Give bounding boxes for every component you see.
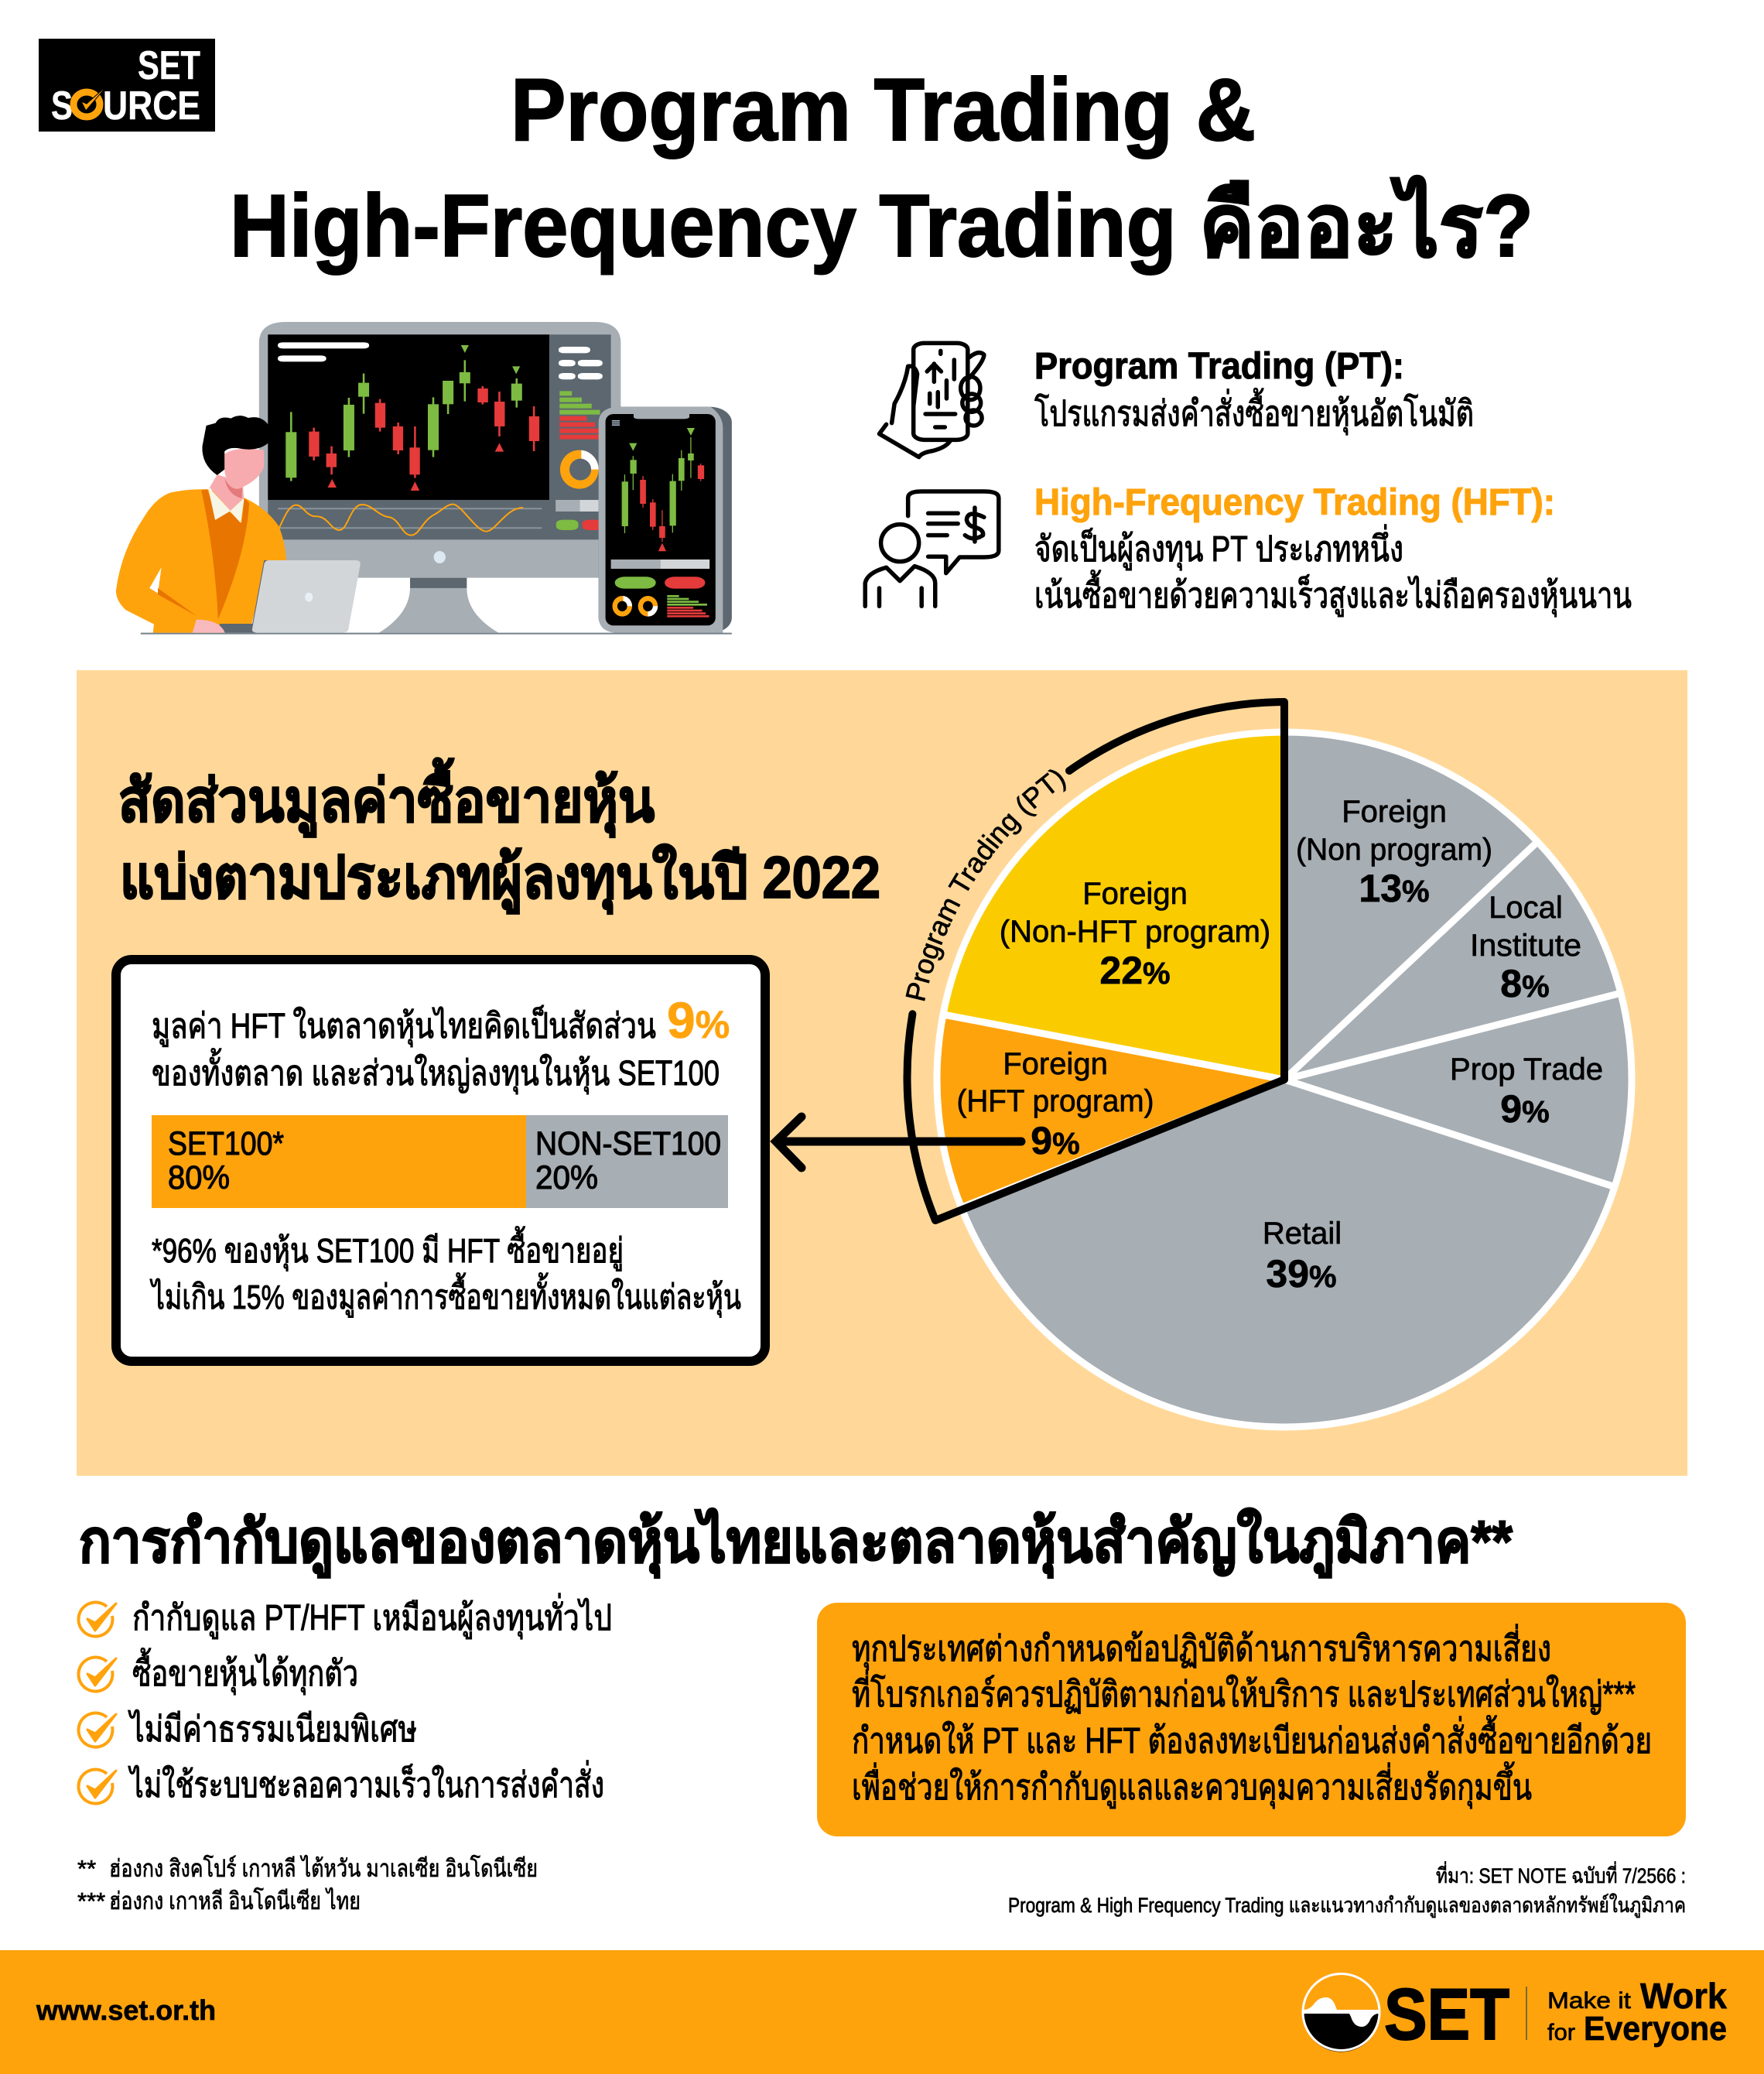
slogan: Everyone [1584, 2010, 1727, 2048]
program trading outline [908, 702, 1284, 1220]
footnotes: ** [77, 1855, 96, 1882]
callout box: HFT value: มูลค่า HFT ในตลาดหุ้นไทยคิดเป็นสัดส่วน [152, 1005, 656, 1047]
SET logo [1303, 1973, 1509, 2055]
logo: SET Source: S [51, 84, 73, 128]
item 1 [78, 1593, 612, 1640]
slogan [1547, 1976, 1727, 2048]
arrow: from HFT slice to callout [776, 1117, 1021, 1168]
curved label: Program Trading (PT): Program Trading (PT) [905, 769, 1066, 1001]
person [116, 416, 361, 633]
text: High-Frequency Trading definition: High-Frequency Trading (HFT): [1034, 482, 1555, 523]
label: Local Institute: 8% [1500, 962, 1550, 1005]
label: Foreign non-HFT program: 22% [1099, 949, 1171, 992]
SET logo: SET [1384, 1973, 1509, 2055]
checklist [78, 1593, 612, 1805]
panel: investor share [77, 670, 1687, 1476]
callout box: HFT value: ไม่เกิน 15% ของมูลค่าการซื้อขายทั้งหมดในแต่ละหุ้น [150, 1272, 741, 1318]
slogan: for [1547, 2020, 1575, 2045]
text: Program Trading definition [1034, 346, 1474, 436]
label: Foreign non program: (Non program) [1296, 833, 1492, 867]
callout: risk rules [817, 1603, 1686, 1836]
footnotes: ฮ่องกง สิงคโปร์ เกาหลี ไต้หวัน มาเลเซีย อินโดนีเซีย [109, 1855, 538, 1882]
logo: SET Source: URCE [103, 84, 200, 128]
footnotes: ฮ่องกง เกาหลี อินโดนีเซีย ไทย [109, 1887, 361, 1915]
label: Local Institute: Local [1489, 891, 1563, 925]
footnotes: *** [77, 1887, 105, 1915]
icon: person with dollar speech bubble [865, 491, 999, 606]
item 3: ไม่มีค่าธรรมเนียมพิเศษ [128, 1709, 417, 1749]
item 1: กำกับดูแล PT/HFT เหมือนผู้ลงทุนทั่วไป [132, 1593, 612, 1640]
label: Foreign non program [1296, 795, 1492, 910]
text: Program Trading definition: โปรแกรมส่งคำสั่งซื้อขายหุ้นอัตโนมัติ [1034, 388, 1474, 436]
pie chart [904, 698, 1636, 1430]
stacked bar: SET100 vs non-SET100 [152, 1115, 728, 1208]
monitor [259, 322, 620, 633]
stacked bar: SET100 vs non-SET100: 80% [168, 1159, 230, 1196]
footnotes [77, 1855, 538, 1915]
label: Foreign non-HFT program: Foreign [1082, 877, 1188, 911]
callout box: HFT value: ของทั้งตลาด และส่วนใหญ่ลงทุนในหุ้น SET100 [152, 1048, 720, 1094]
callout box: HFT value [116, 960, 765, 1361]
label: Retail: 39% [1266, 1252, 1337, 1295]
title: Program Trading & [511, 61, 1256, 159]
item 4 [78, 1760, 604, 1805]
panel heading: สัดส่วนมูลค่าซื้อขายหุ้น [118, 758, 655, 838]
text: High-Frequency Trading definition: จัดเป็นผู้ลงทุน PT ประเภทหนึ่ง [1034, 524, 1403, 571]
label: Prop Trade: Prop Trade [1450, 1052, 1603, 1087]
source [1008, 1861, 1686, 1918]
label: Local Institute [1470, 891, 1581, 1005]
label: Prop Trade [1450, 1052, 1603, 1131]
illustration: trader with monitor and phone [116, 322, 732, 635]
heading: regulation: การกำกับดูแลของตลาดหุ้นไทยและตลาดหุ้นสำคัญในภูมิภาค** [79, 1508, 1513, 1579]
candlesticks [285, 345, 539, 491]
item 2: ซื้อขายหุ้นได้ทุกตัว [132, 1648, 358, 1696]
footer band [0, 1950, 1764, 2074]
label: Local Institute: Institute [1470, 929, 1581, 963]
phone [599, 407, 732, 633]
title: High-Frequency Trading คืออะไร? [230, 176, 1533, 276]
label: Foreign non-HFT program [1000, 877, 1270, 992]
label: Prop Trade: 9% [1500, 1087, 1550, 1131]
text: Program Trading definition: Program Trading (PT): [1034, 346, 1404, 387]
callout box: HFT value: *96% ของหุ้น SET100 มี HFT ซื้อขายอยู่ [152, 1226, 624, 1271]
title [230, 61, 1533, 276]
label: Foreign HFT program: Foreign [1003, 1047, 1108, 1081]
stacked bar: SET100 vs non-SET100: NON-SET100 [535, 1125, 721, 1162]
website: www.set.or.th [36, 1994, 216, 2026]
slogan: Make it [1547, 1988, 1632, 2014]
text: High-Frequency Trading definition [1034, 482, 1632, 618]
label: Retail: Retail [1263, 1217, 1342, 1251]
callout: risk rules: เพื่อช่วยให้การกำกับดูแลและควบคุมความเสี่ยงรัดกุมขึ้น [852, 1761, 1532, 1809]
callout: risk rules: ทุกประเทศต่างกำหนดข้อปฏิบัติด้านการบริหารความเสี่ยง [852, 1624, 1551, 1671]
item 2 [78, 1648, 358, 1696]
logo: SET Source [39, 39, 215, 132]
label: Retail [1263, 1217, 1342, 1295]
logo: SET Source: SET [138, 43, 200, 88]
label: Foreign non program: 13% [1359, 867, 1430, 910]
slogan: Work [1640, 1976, 1727, 2016]
item 4: ไม่ใช้ระบบชะลอความเร็วในการส่งคำสั่ง [128, 1760, 604, 1805]
label: Foreign HFT program [956, 1047, 1154, 1162]
icon: hand holding phone [879, 343, 984, 457]
label: Foreign HFT program: 9% [1031, 1119, 1080, 1162]
label: Foreign non-HFT program: (Non-HFT program) [1000, 915, 1270, 949]
panel heading: แบ่งตามประเภทผู้ลงทุนในปี 2022 [120, 844, 880, 915]
stacked bar: SET100 vs non-SET100: 20% [535, 1159, 598, 1196]
source: ที่มา: SET NOTE ฉบับที่ 7/2566 : [1436, 1861, 1686, 1887]
callout box: HFT value: 9% [667, 991, 730, 1049]
label: Foreign HFT program: (HFT program) [956, 1084, 1154, 1118]
panel heading [118, 758, 880, 915]
stacked bar: SET100 vs non-SET100: SET100* [168, 1125, 284, 1162]
label: Foreign non program: Foreign [1342, 795, 1447, 829]
